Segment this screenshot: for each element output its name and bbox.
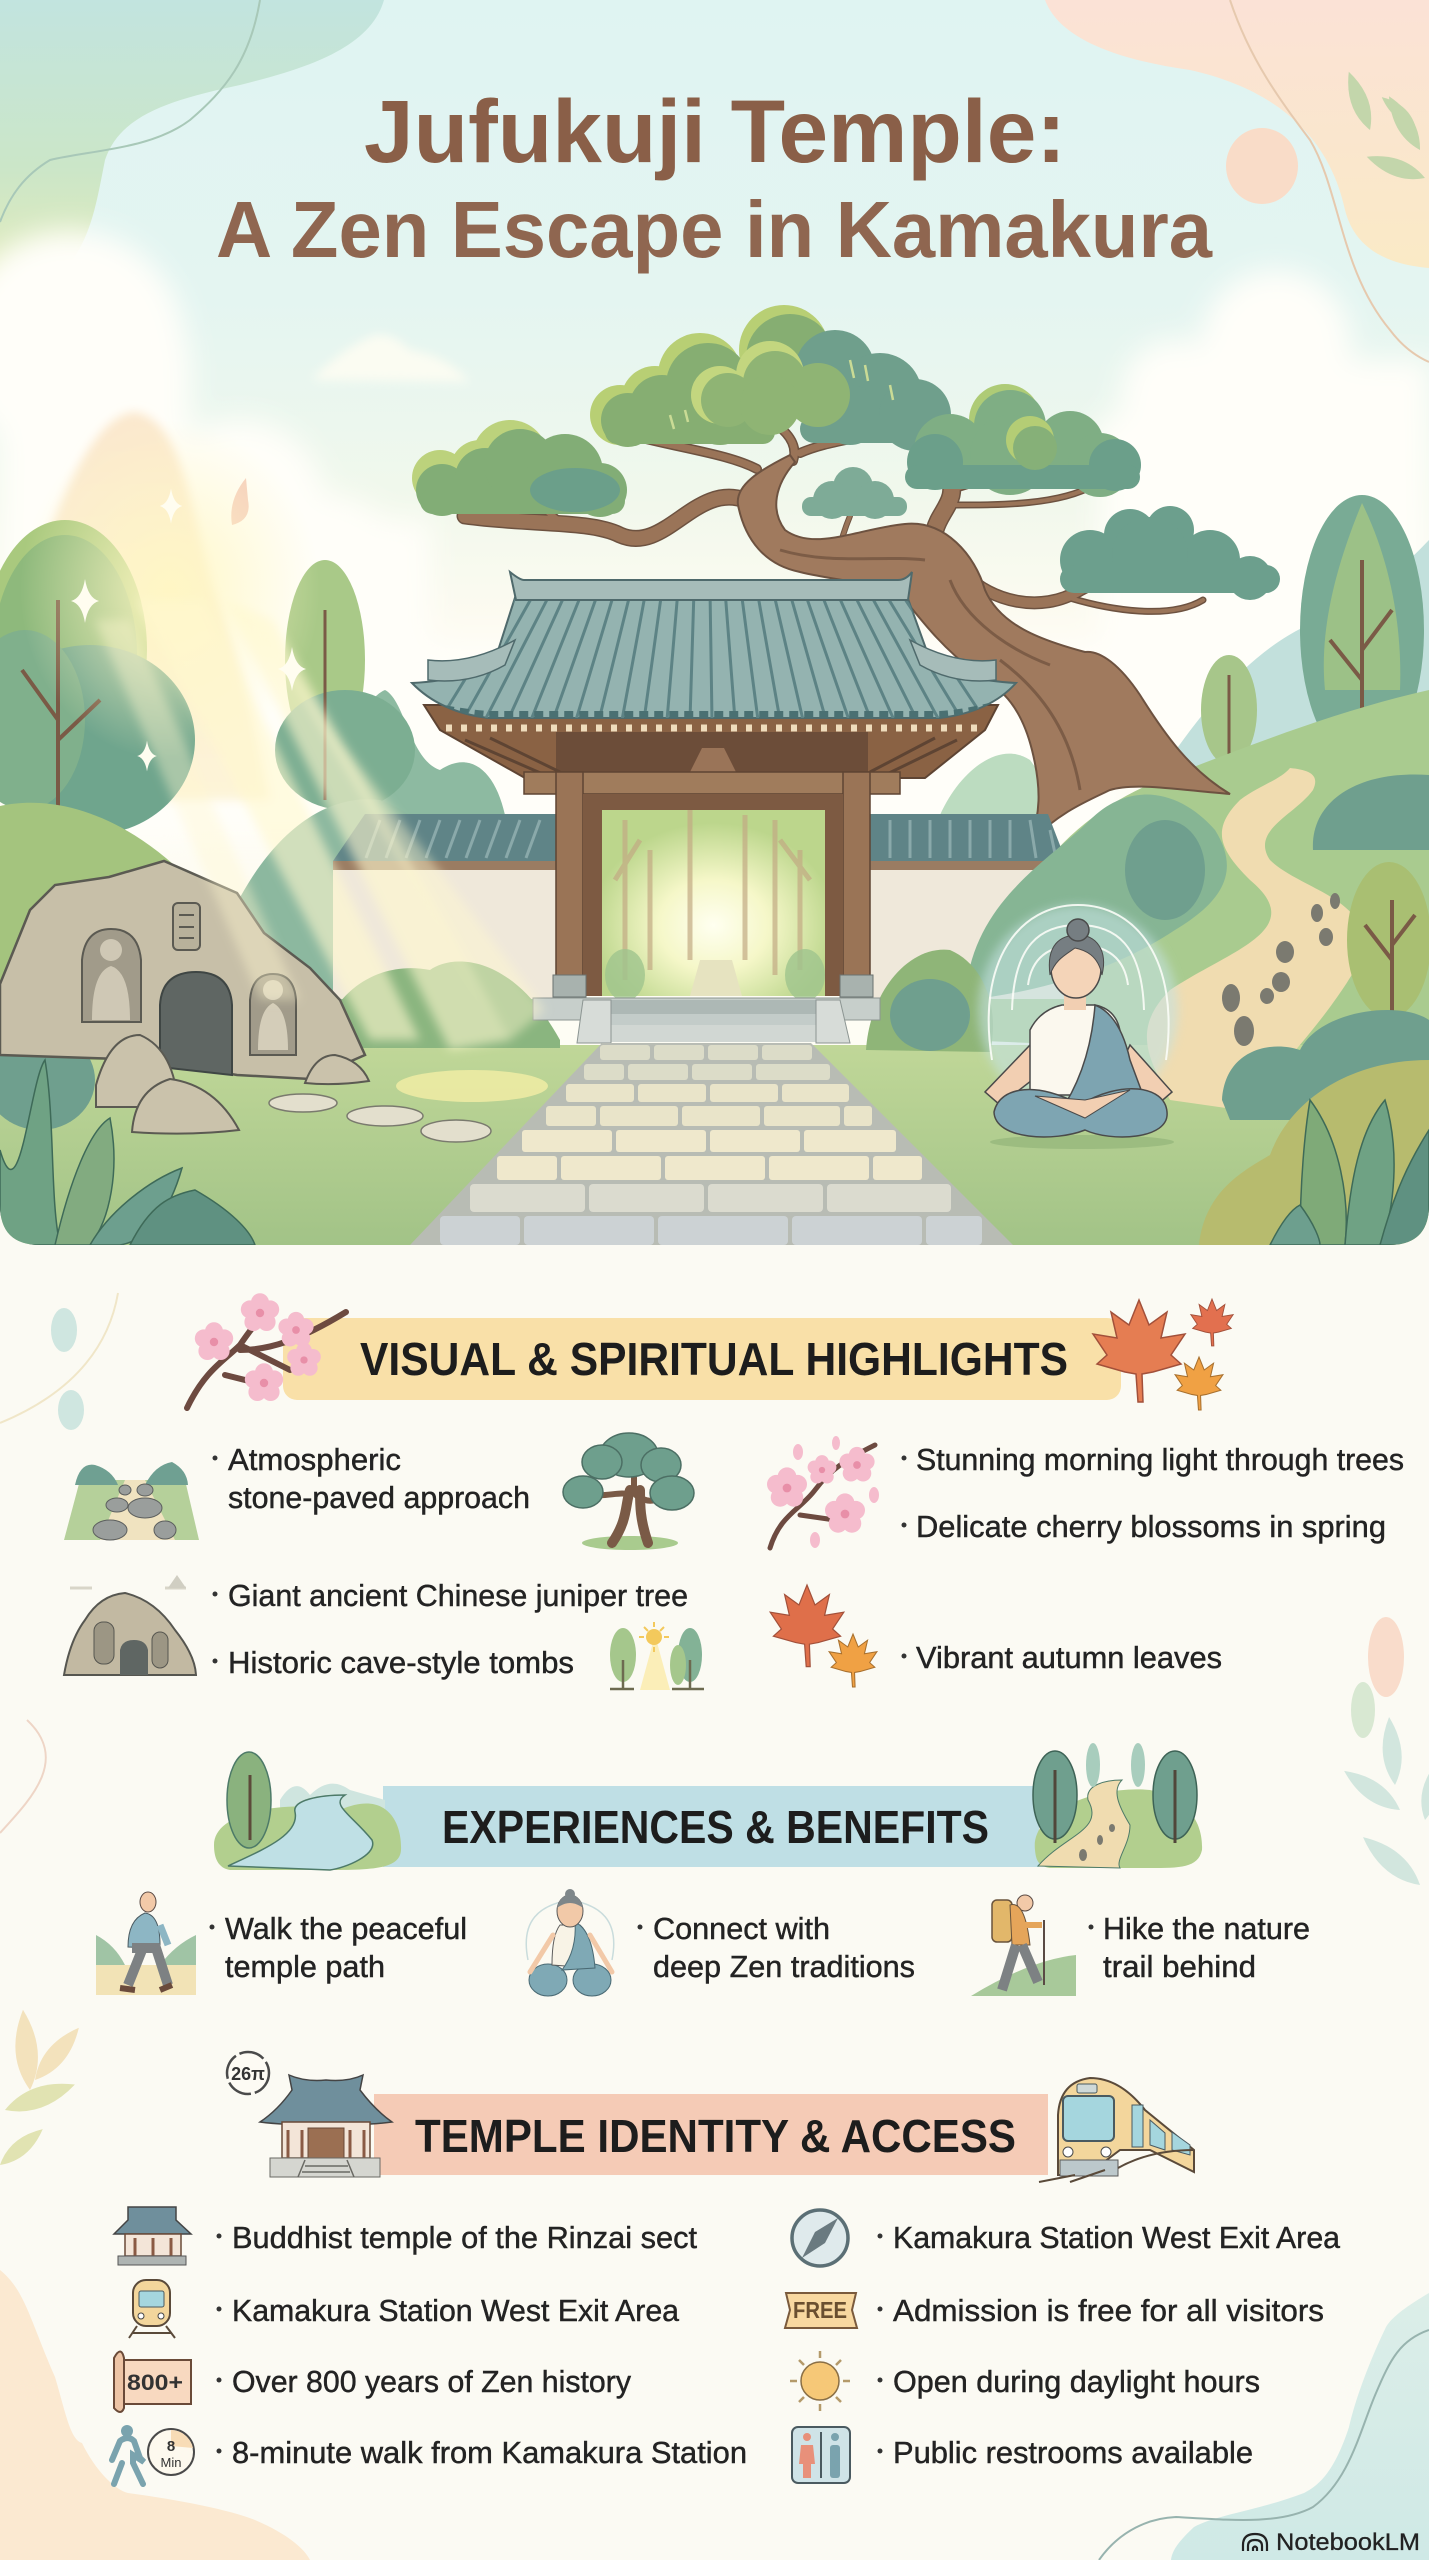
teal bush: left	[0, 1030, 95, 1130]
decorative background: lower page	[0, 1293, 1429, 2560]
small cloud	[312, 335, 470, 382]
temple wall	[333, 814, 1066, 999]
tree: branches	[465, 412, 1203, 611]
section: temple identity and access	[112, 2052, 1341, 2484]
meditating figure	[978, 905, 1178, 1149]
icon: header maple leaves	[1093, 1299, 1233, 1410]
tree: left second	[275, 560, 415, 810]
text: atmospheric stone-paved approach	[212, 1442, 530, 1515]
warm glow mountain	[50, 408, 266, 803]
text: hike the trail	[1088, 1911, 1310, 1984]
text: station exit: Kamakura Station West Exit Area	[232, 2293, 680, 2328]
posts and beams	[524, 772, 900, 794]
text: walk the path: Walk the peaceful	[225, 1911, 467, 1946]
text: walk the path	[210, 1911, 467, 1984]
text: rinzai sect: Buddhist temple of the Rinzai sect	[232, 2220, 697, 2255]
icon: temple	[114, 2207, 191, 2265]
icon: age badge: 26π	[231, 2064, 265, 2084]
icon: meditating person	[526, 1889, 614, 1996]
icon: stone path	[64, 1462, 199, 1540]
NotebookLM logo: NotebookLM	[1276, 2529, 1420, 2556]
heading banner	[283, 1318, 1121, 1400]
lawn	[0, 1045, 1429, 1245]
sun rays	[95, 600, 545, 1050]
petal	[231, 478, 249, 525]
text: 8-minute walk: 8-minute walk from Kamakura Station	[232, 2435, 747, 2470]
sun glow	[20, 420, 320, 760]
tree: small centre canopy	[802, 467, 907, 519]
icon: hiker	[971, 1895, 1076, 1996]
plant: bottom left	[0, 1060, 255, 1245]
panel: hero scene	[0, 0, 1429, 1245]
title: Jufukuji Temple:	[364, 81, 1066, 181]
background blob: top left	[0, 0, 384, 272]
plant and bush: bottom right	[1199, 1060, 1429, 1245]
thin lines	[0, 0, 1429, 362]
icon: trail with trees	[1033, 1743, 1202, 1868]
text: hike the trail: Hike the nature	[1103, 1911, 1310, 1946]
heading banner	[383, 1786, 1039, 1867]
icon: age badge	[227, 2052, 269, 2094]
hill: right teal bush	[966, 795, 1227, 1000]
icon: autumn leaves	[770, 1585, 877, 1687]
text: walk the path: temple path	[225, 1949, 385, 1984]
stepping stones	[269, 1094, 491, 1142]
icon: walking person	[96, 1892, 196, 1995]
background hills: left teal slope	[240, 800, 532, 1000]
text: atmospheric stone-paved approach: stone-paved approach	[228, 1480, 530, 1515]
text: restrooms: Public restrooms available	[893, 2435, 1253, 2470]
glow on lawn	[396, 1070, 548, 1102]
sparkles	[71, 488, 306, 771]
icon: train	[129, 2280, 175, 2338]
temple gate	[412, 572, 1016, 1001]
icon: sunlight through trees	[610, 1622, 704, 1690]
text: 800 years: Over 800 years of Zen history	[232, 2364, 631, 2399]
sky	[86, 0, 1429, 518]
text: cherry blossoms: Delicate cherry blossoms in spring	[916, 1509, 1386, 1544]
tree: far right tall	[1300, 495, 1424, 722]
roof	[412, 572, 1016, 720]
rocks	[96, 1035, 369, 1134]
text: zen traditions	[638, 1911, 915, 1984]
hill: left mound	[0, 803, 275, 1060]
heading banner: EXPERIENCES & BENEFITS	[442, 1801, 989, 1853]
icon: cave tomb	[64, 1575, 196, 1675]
icon: walk and clock: Min	[161, 2455, 181, 2470]
leaves: top right	[1348, 72, 1425, 180]
tree: small right	[1201, 655, 1257, 758]
tree: right canopy	[905, 384, 1141, 497]
text: cave-style tombs: Historic cave-style tombs	[228, 1645, 574, 1680]
icon: walk and clock	[112, 2425, 194, 2484]
eave and brackets	[424, 705, 998, 778]
tree: top canopy	[590, 305, 955, 451]
tree: left big	[0, 520, 195, 835]
icon: compass	[792, 2210, 848, 2266]
icon: history scroll: 800+	[127, 2370, 183, 2395]
bushes: right side	[1222, 774, 1429, 1120]
heading banner	[374, 2094, 1048, 2175]
icon: history scroll	[114, 2352, 191, 2412]
icon: free sign	[785, 2293, 857, 2328]
text: free admission: Admission is free for all visitors	[893, 2293, 1324, 2328]
background hills behind wall	[340, 690, 1060, 815]
icon: restroom sign	[792, 2427, 850, 2483]
heading banner: VISUAL & SPIRITUAL HIGHLIGHTS	[360, 1333, 1068, 1385]
text: station exit (right): Kamakura Station West Exit Area	[893, 2220, 1341, 2255]
doorway view	[602, 810, 825, 1001]
accent oval	[1226, 128, 1298, 204]
text: autumn leaves: Vibrant autumn leaves	[916, 1640, 1222, 1675]
tree: main trunk and roots	[738, 455, 1230, 842]
text: juniper tree: Giant ancient Chinese juniper tree	[228, 1578, 688, 1613]
text: morning light: Stunning morning light through trees	[916, 1442, 1404, 1477]
background blob: top right	[1045, 0, 1429, 268]
stone caves	[0, 861, 365, 1079]
tree: far right canopy	[1060, 506, 1280, 600]
icon: sun	[790, 2351, 850, 2411]
icon: cherry blossom branch	[767, 1436, 879, 1548]
winding trail	[1147, 768, 1363, 1110]
hill: right green	[990, 690, 1429, 1045]
text: hike the trail: trail behind	[1103, 1949, 1256, 1984]
temple stairs	[533, 998, 880, 1043]
hills: far right	[1178, 540, 1429, 766]
section: visual and spiritual highlights	[64, 1293, 1404, 1690]
title: A Zen Escape in Kamakura	[216, 185, 1212, 274]
stone-paved path	[410, 1043, 1013, 1245]
bushes: beside stairs	[320, 950, 993, 1052]
text: daylight hours: Open during daylight hours	[893, 2364, 1260, 2399]
tree: left canopy	[412, 420, 627, 517]
section: experiences and benefits	[96, 1743, 1310, 1996]
text: atmospheric stone-paved approach: Atmospheric	[228, 1442, 401, 1477]
icon: free sign: FREE	[793, 2297, 847, 2323]
heading banner: TEMPLE IDENTITY & ACCESS	[415, 2110, 1016, 2162]
icon: header train	[1039, 2078, 1194, 2182]
background: soft clouds	[0, 217, 1429, 672]
icon: header temple	[260, 2075, 392, 2177]
icon: header cherry branch	[187, 1293, 346, 1408]
icon: juniper tree	[563, 1433, 694, 1550]
icon: walk and clock: 8	[167, 2438, 175, 2455]
footprints	[1222, 893, 1340, 1046]
title	[216, 81, 1212, 274]
icon: river landscape	[214, 1752, 401, 1870]
text: zen traditions: deep Zen traditions	[653, 1949, 915, 1984]
text: zen traditions: Connect with	[653, 1911, 830, 1946]
